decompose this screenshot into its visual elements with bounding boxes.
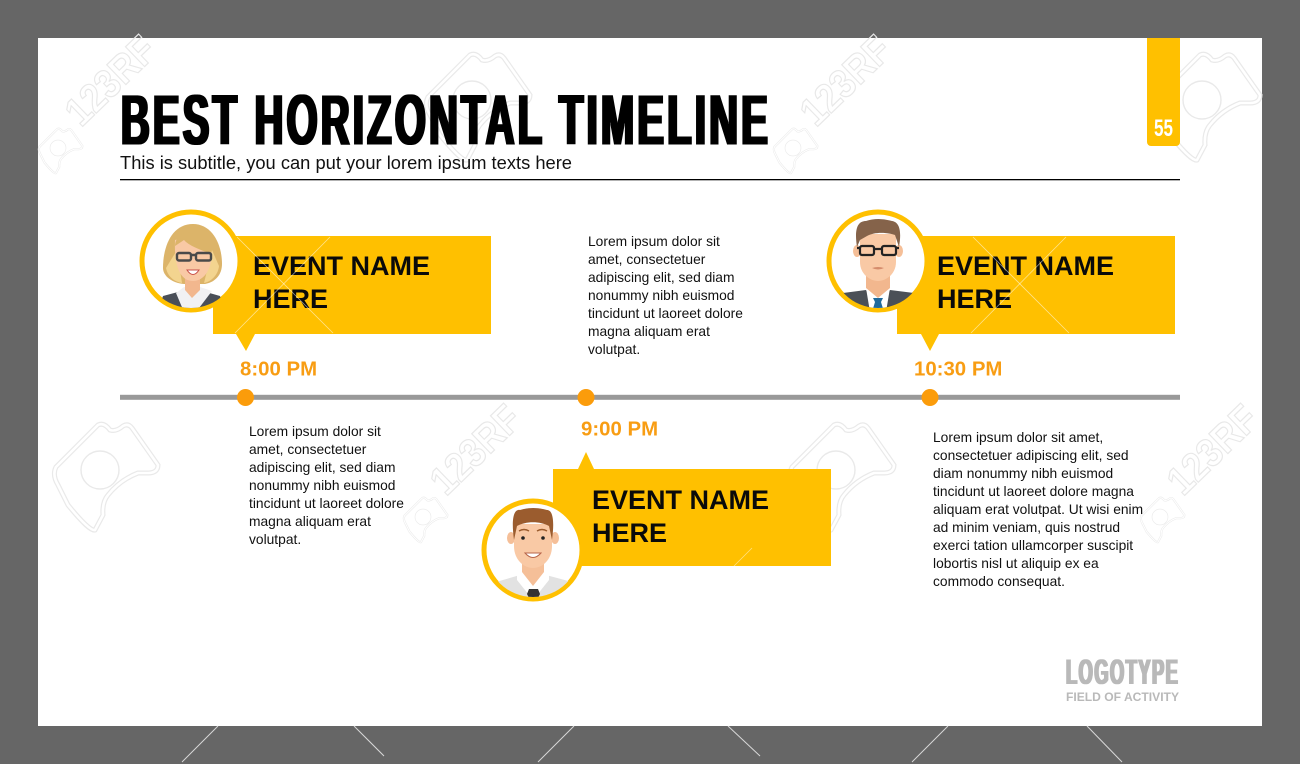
event 1 description: volutpat. <box>249 532 301 547</box>
event 2 time: 9:00 PM <box>581 418 658 440</box>
event 1 description: adipiscing elit, sed diam <box>249 460 395 475</box>
timeline axis <box>120 395 1180 400</box>
event 2 description: volutpat. <box>588 342 640 357</box>
event 1 description: magna aliquam erat <box>249 514 371 529</box>
event 1 callout <box>213 236 491 351</box>
event 1 description <box>249 424 404 547</box>
event 3 description <box>933 430 1143 589</box>
event 2 description <box>588 234 743 357</box>
event 3 callout <box>897 236 1175 351</box>
event 1 callout: HERE <box>253 284 328 314</box>
event 1 description: amet, consectetuer <box>249 442 367 457</box>
event 2 description: nonummy nibh euismod <box>588 288 734 303</box>
logotype: FIELD OF ACTIVITY <box>1066 690 1179 704</box>
event 3 description: diam nonummy nibh euismod <box>933 466 1113 481</box>
timeline markers <box>237 389 938 406</box>
watermarks: 123RF <box>1159 397 1267 503</box>
event 3 callout: HERE <box>937 284 1012 314</box>
event 3 description: Lorem ipsum dolor sit amet, <box>933 430 1103 445</box>
event 1 time: 8:00 PM <box>240 358 317 380</box>
event 2 avatar: man <box>484 501 582 600</box>
event 2 description: tincidunt ut laoreet dolore <box>588 306 743 321</box>
event 2 description: amet, consectetuer <box>588 252 706 267</box>
event 1 description: tincidunt ut laoreet dolore <box>249 496 404 511</box>
subtitle: This is subtitle, you can put your lorem ipsum texts here <box>120 153 572 173</box>
event 3 description: lobortis nisl ut aliquip ex ea <box>933 556 1099 571</box>
event 2 description: adipiscing elit, sed diam <box>588 270 734 285</box>
event 1 callout: EVENT NAME <box>253 251 430 281</box>
event 3 description: ad minim veniam, quis nostrud <box>933 520 1120 535</box>
event 3 description: exerci tation ullamcorper suscipit <box>933 538 1133 553</box>
watermarks <box>39 28 1267 542</box>
event 3 description: commodo consequat. <box>933 574 1065 589</box>
event 2 description: magna aliquam erat <box>588 324 710 339</box>
event 1 avatar: woman <box>142 212 240 312</box>
watermarks: 123RF <box>792 28 900 134</box>
event 3 description: consectetuer adipiscing elit, sed <box>933 448 1129 463</box>
event 2 description: Lorem ipsum dolor sit <box>588 234 720 249</box>
watermarks: 123RF <box>422 397 530 503</box>
event 3 time: 10:30 PM <box>914 358 1002 380</box>
event 2 callout: HERE <box>592 518 667 548</box>
watermark lines on the frame <box>182 726 1122 762</box>
watermarks: 123RF <box>57 28 165 134</box>
event 3 description: aliquam erat volutpat. Ut wisi enim <box>933 502 1143 517</box>
event 3 description: tincidunt ut laoreet dolore magna <box>933 484 1134 499</box>
logotype: LOGOTYPE <box>1066 653 1178 692</box>
event 1 description: nonummy nibh euismod <box>249 478 395 493</box>
page number tab <box>1147 38 1180 146</box>
event 3 avatar: man with glasses <box>829 212 927 312</box>
event 1 description: Lorem ipsum dolor sit <box>249 424 381 439</box>
page number tab: 55 <box>1154 115 1173 142</box>
header rule <box>120 179 1180 180</box>
event 3 callout: EVENT NAME <box>937 251 1114 281</box>
event 2 callout: EVENT NAME <box>592 485 769 515</box>
title: BEST HORIZONTAL TIMELINE <box>121 82 768 161</box>
event 2 callout <box>553 452 831 566</box>
